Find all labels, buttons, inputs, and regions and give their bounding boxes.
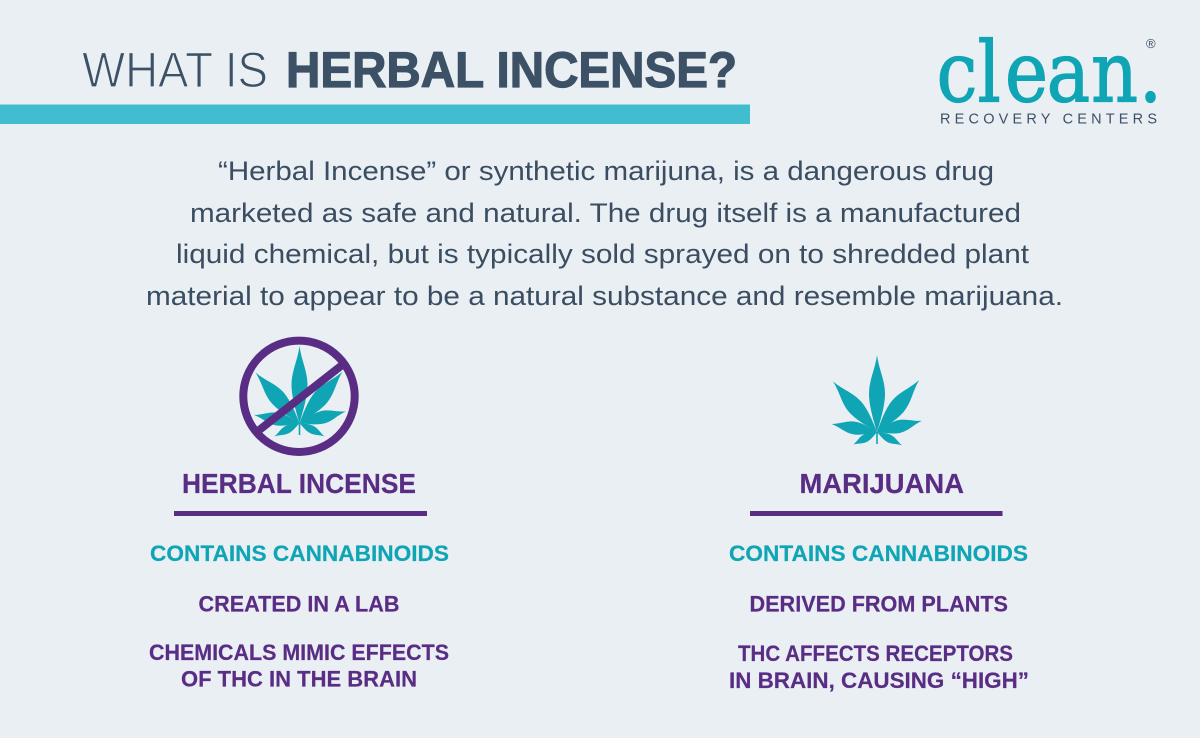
title underline bar <box>0 104 750 124</box>
item: derived from plants: DERIVED FROM PLANTS <box>750 592 1008 616</box>
title: HERBAL INCENSE? <box>286 42 737 98</box>
intro paragraph: liquid chemical, but is typically sold sprayed on to shredded plant <box>176 239 1030 269</box>
panel: herbal incense <box>149 341 449 692</box>
heading rule <box>750 511 1002 516</box>
heading: herbal incense: HERBAL INCENSE <box>182 468 416 499</box>
item: created in a lab: CREATED IN A LAB <box>198 592 400 616</box>
heading: marijuana: MARIJUANA <box>800 468 964 499</box>
title: WHAT IS <box>82 42 268 98</box>
item: thc affects receptors: IN BRAIN, CAUSING “HIGH” <box>729 668 1029 693</box>
intro paragraph: “Herbal Incense” or synthetic marijuna, is a dangerous drug <box>218 156 994 186</box>
intro paragraph <box>146 156 1063 311</box>
logo: clean recovery centers: ® <box>1146 36 1156 51</box>
title <box>82 42 737 98</box>
item: contains cannabinoids: CONTAINS CANNABINOIDS <box>729 541 1028 566</box>
item: thc affects receptors: THC AFFECTS RECEPTORS <box>738 641 1013 666</box>
item: thc affects receptors <box>729 641 1029 693</box>
item: chemicals mimic effects: OF THC IN THE BRAIN <box>181 666 417 692</box>
logo: clean recovery centers: RECOVERY CENTERS <box>940 111 1157 127</box>
intro paragraph: material to appear to be a natural substance and resemble marijuana. <box>146 281 1063 311</box>
panel: marijuana <box>729 355 1029 693</box>
heading rule <box>174 511 427 516</box>
logo: clean recovery centers: clean. <box>937 24 1162 122</box>
item: chemicals mimic effects <box>149 640 449 692</box>
icon: crossed-out cannabis leaf <box>243 341 355 452</box>
item: contains cannabinoids: CONTAINS CANNABINOIDS <box>150 541 449 566</box>
item: chemicals mimic effects: CHEMICALS MIMIC EFFECTS <box>149 640 449 665</box>
icon: cannabis leaf <box>827 355 925 449</box>
intro paragraph: marketed as safe and natural. The drug itself is a manufactured <box>190 198 1021 228</box>
